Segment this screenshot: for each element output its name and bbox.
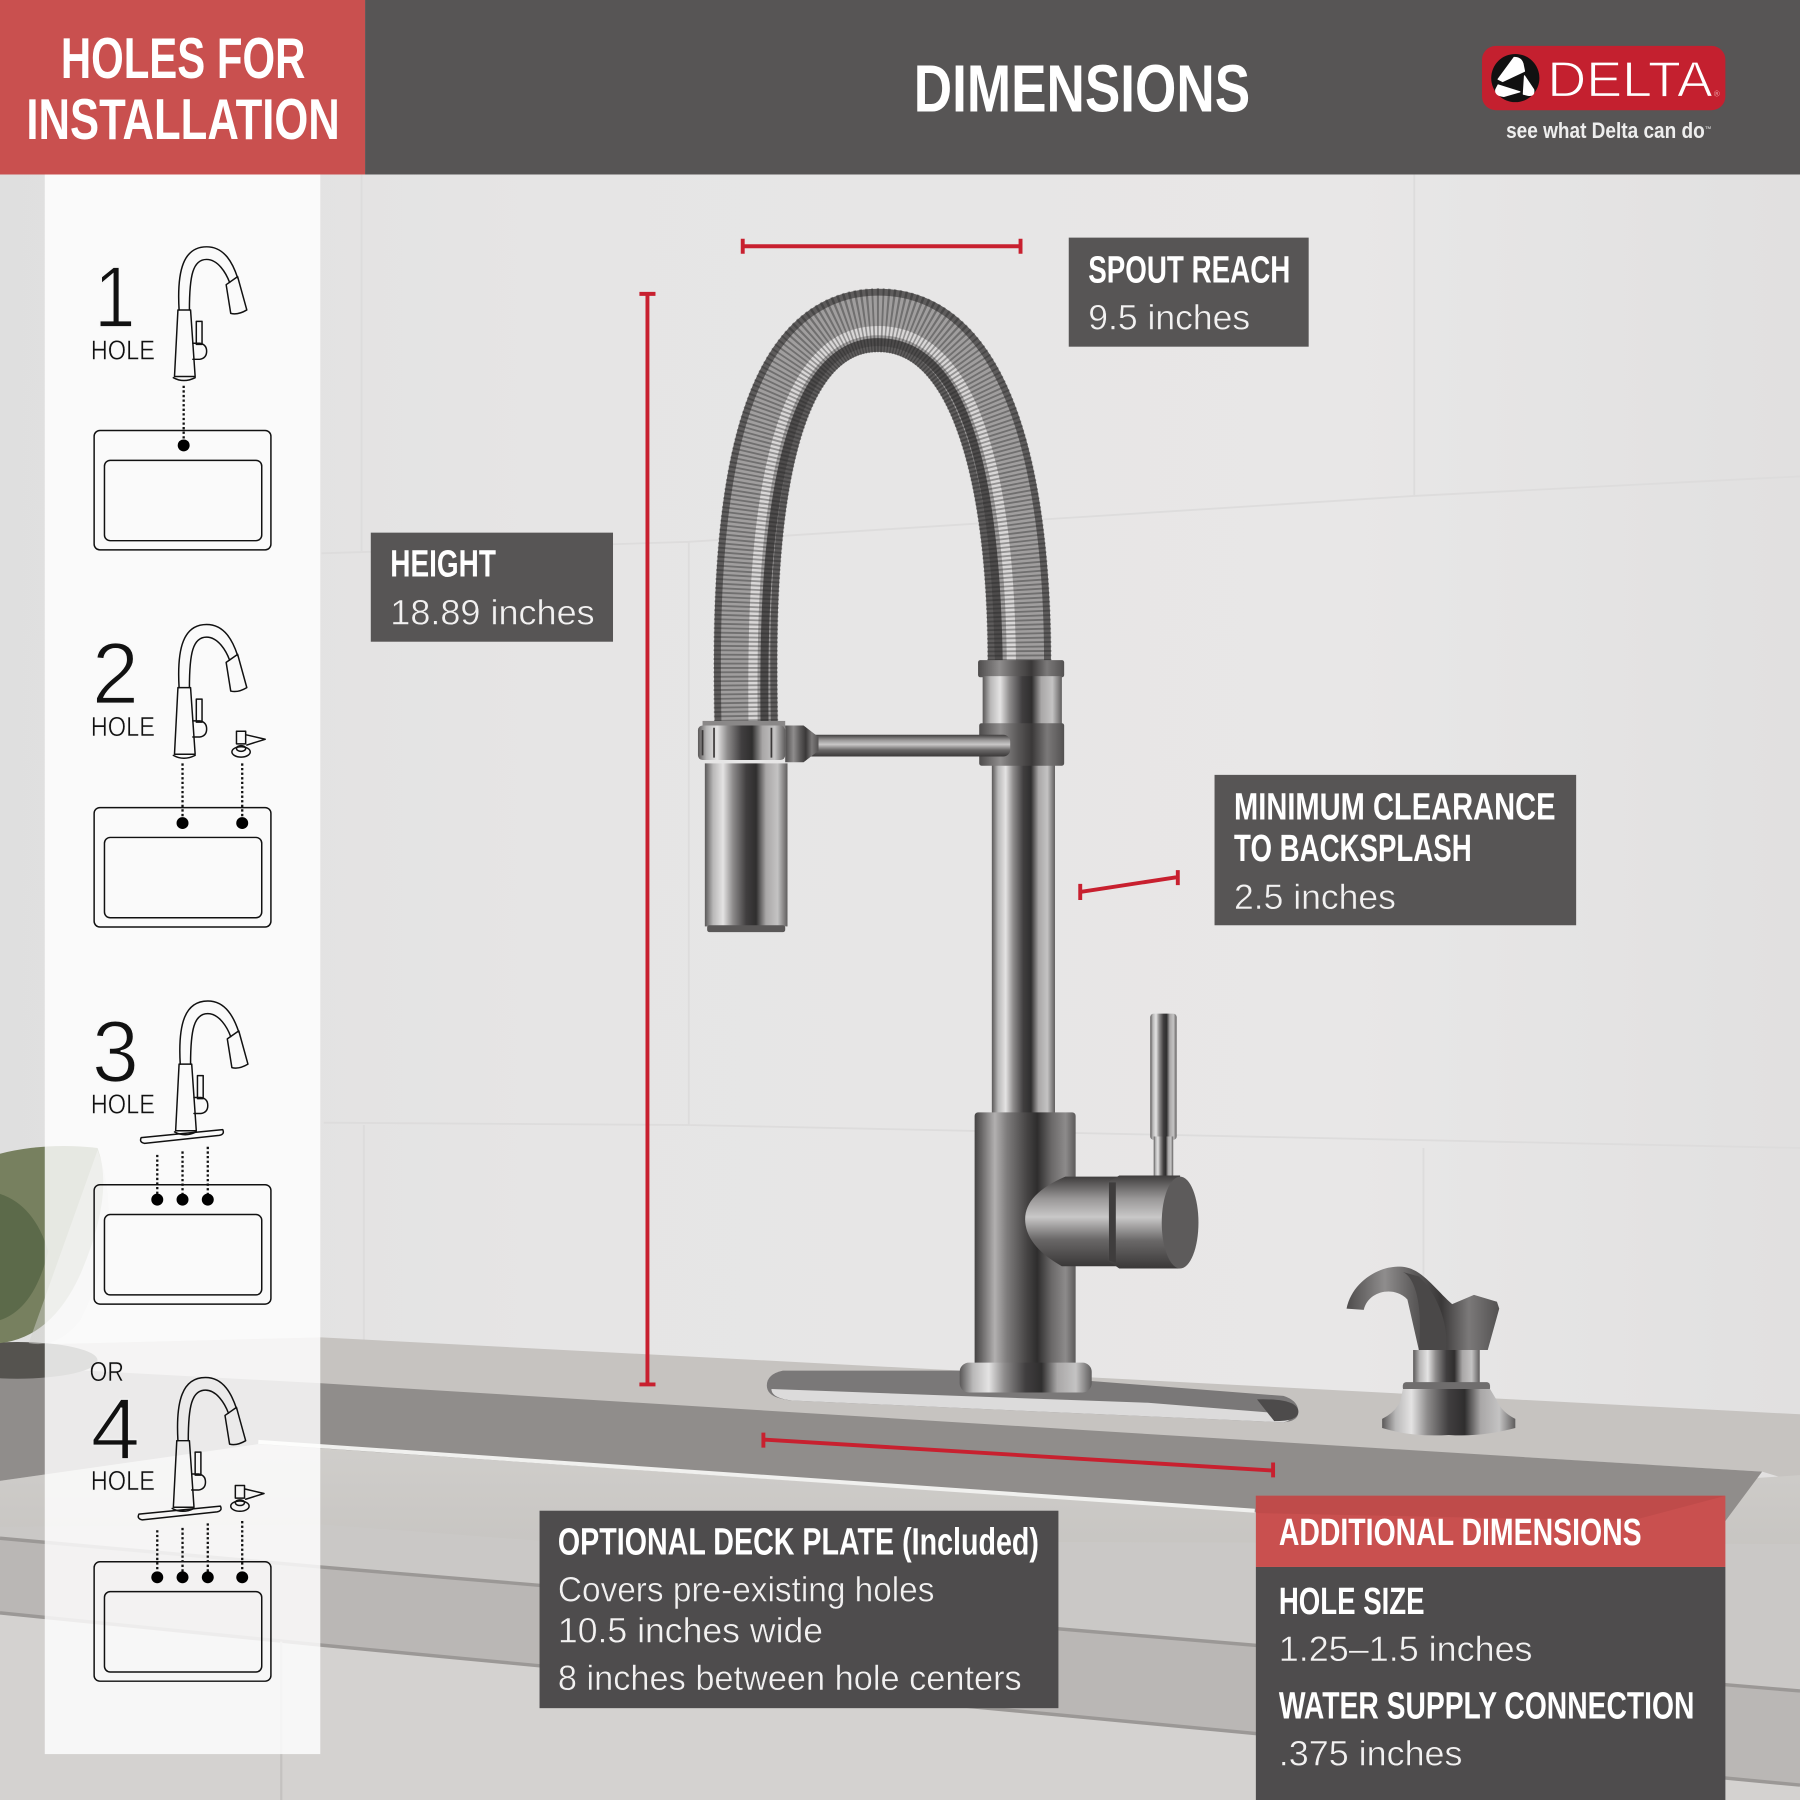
Delta logo: ™ [1705, 126, 1712, 133]
Delta logo: see what Delta can do [1506, 118, 1705, 143]
label: spout reach [1069, 238, 1309, 347]
label: optional deck plate: 10.5 inches wide [558, 1611, 823, 1651]
soap dispenser [1347, 1267, 1515, 1435]
label: minimum clearance [1215, 775, 1576, 925]
dimension line: deck plate width [763, 1433, 1273, 1477]
label: spout reach: 9.5 inches [1088, 297, 1250, 337]
panel: additional dimensions [1256, 1496, 1725, 1800]
option: or 4 hole: HOLE [91, 1465, 155, 1496]
label: minimum clearance: 2.5 inches [1234, 877, 1396, 917]
dimension line: backsplash clearance [1080, 870, 1178, 900]
panel: additional dimensions: HOLE SIZE [1279, 1581, 1425, 1623]
panel: additional dimensions: 1.25–1.5 inches [1279, 1629, 1533, 1669]
option: 2 hole: 2 [92, 626, 139, 723]
label: optional deck plate: OPTIONAL DECK PLATE (Included) [558, 1521, 1039, 1563]
option: 3 hole: 3 [92, 1003, 139, 1100]
label: height: 18.89 inches [390, 592, 595, 632]
option: 3 hole [91, 1001, 271, 1304]
label: height: HEIGHT [390, 543, 496, 585]
label: optional deck plate [540, 1511, 1058, 1708]
spray head [698, 721, 818, 932]
label: height [371, 533, 613, 642]
Delta logo: ® [1714, 89, 1720, 98]
label: optional deck plate: Covers pre-existing holes [558, 1569, 934, 1609]
gooseneck coil [746, 320, 1019, 726]
Delta logo: DELTA [1547, 50, 1713, 107]
label: minimum clearance: MINIMUM CLEARANCE [1234, 787, 1555, 829]
heading: holes for installation [26, 27, 340, 152]
faucet photo [698, 320, 1515, 1435]
panel: additional dimensions: .375 inches [1279, 1734, 1462, 1774]
panel: holes for installation [45, 174, 320, 1754]
option: or 4 hole: 4 [91, 1381, 140, 1478]
label: minimum clearance: TO BACKSPLASH [1234, 828, 1472, 870]
title: DIMENSIONS [914, 52, 1250, 126]
header bar [0, 0, 1800, 174]
option: 2 hole [91, 624, 271, 927]
Delta logo [1482, 46, 1725, 143]
body and handle [975, 1014, 1198, 1367]
salad bowl [0, 1146, 109, 1379]
option: 1 hole: HOLE [91, 334, 155, 365]
dimension line: height [639, 294, 655, 1384]
option: 3 hole: HOLE [91, 1089, 155, 1120]
deck plate [767, 1371, 1298, 1422]
label: optional deck plate: 8 inches between hole centers [558, 1658, 1022, 1698]
arm and pipe [804, 660, 1064, 1116]
label: spout reach: SPOUT REACH [1088, 249, 1290, 291]
option: 2 hole: HOLE [91, 711, 155, 742]
option: 1 hole [91, 247, 271, 550]
heading: holes for installation: INSTALLATION [26, 88, 340, 152]
option: 1 hole: 1 [94, 249, 135, 346]
option: or 4 hole [90, 1356, 271, 1681]
dimension line: spout reach [743, 239, 1021, 254]
heading: holes for installation: HOLES FOR [61, 27, 305, 91]
option: or 4 hole: OR [90, 1356, 124, 1387]
base flange [960, 1363, 1092, 1392]
panel: additional dimensions: ADDITIONAL DIMENSIONS [1279, 1512, 1642, 1554]
